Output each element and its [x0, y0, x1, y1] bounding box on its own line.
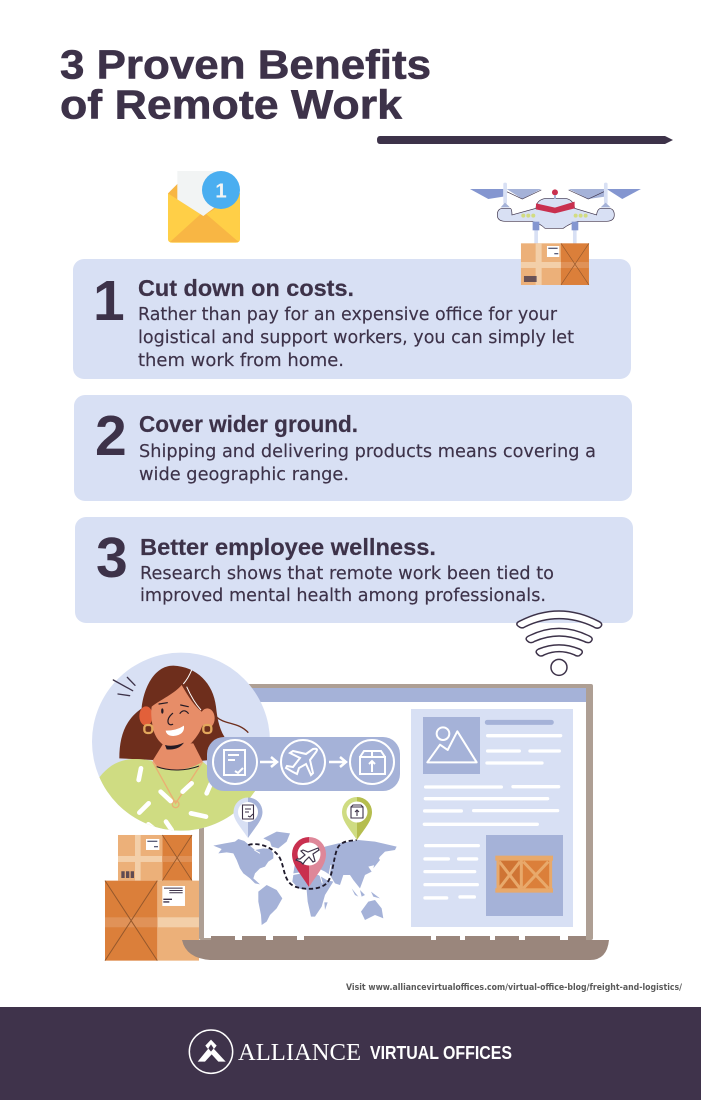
illustration: woman in circle — [92, 653, 270, 847]
icon: envelope with notification: 1 — [215, 179, 227, 202]
neck — [153, 743, 203, 770]
hair — [119, 666, 227, 762]
panel: benefit 1: Cut down on costs. — [138, 275, 354, 301]
dashed route — [248, 840, 357, 889]
panel: benefit 1: Rather than pay for an expensive office for your — [138, 305, 558, 325]
logo wordmark: ALLIANCE — [238, 1040, 361, 1066]
laptop base — [182, 936, 609, 960]
upper parcel — [118, 835, 192, 881]
title — [60, 42, 431, 128]
map pin: plane — [292, 837, 326, 887]
laptop frame — [199, 684, 593, 940]
panel: benefit 2: Cover wider ground. — [139, 411, 358, 437]
icon: document — [213, 740, 257, 784]
footer band — [0, 1007, 701, 1100]
shirt dashes — [139, 768, 211, 830]
panel: benefit 3: 3 — [96, 526, 128, 590]
title: 3 Proven Benefits — [60, 42, 431, 88]
icon: wifi signal — [517, 611, 602, 675]
panel: benefit 1 — [73, 259, 631, 379]
panel: benefit 2: 2 — [95, 404, 127, 468]
title underline bar — [377, 136, 673, 144]
map pin: parcel — [342, 797, 372, 840]
world map — [213, 832, 397, 925]
process pill with icons — [207, 737, 400, 791]
shirt — [100, 759, 255, 831]
panel: benefit 1: them work from home. — [138, 351, 344, 371]
surprise lines — [113, 677, 135, 696]
hair strand — [216, 717, 248, 733]
face — [151, 685, 203, 750]
map pin: document — [234, 798, 262, 838]
panel: benefit 3: Better employee wellness. — [140, 534, 436, 560]
panel: benefit 2: wide geographic range. — [139, 465, 349, 485]
panel: benefit 1: 1 — [93, 269, 125, 333]
panel: benefit 3 — [75, 517, 633, 623]
stacked parcels — [105, 835, 199, 961]
icon: envelope with notification — [168, 171, 240, 243]
arrow — [329, 757, 346, 767]
arrow — [260, 757, 277, 767]
panel: benefit 3: improved mental health among professionals. — [140, 586, 546, 606]
panel: benefit 3: Research shows that remote work been tied to — [140, 564, 554, 584]
icon: delivery drone with parcel — [470, 183, 641, 285]
laptop screen — [199, 684, 593, 940]
panel: benefit 2: Shipping and delivering products means covering a — [139, 442, 596, 462]
panel: benefit 1: logistical and support workers, you can simply let — [138, 328, 574, 348]
icon: parcel — [350, 740, 394, 784]
panel: benefit 2 — [74, 395, 632, 501]
ears — [139, 706, 153, 726]
title: of Remote Work — [60, 82, 402, 128]
icon: plane — [281, 740, 325, 784]
lower parcel — [105, 881, 199, 961]
source link: Visit www.alliancevirtualoffices.com/virtual-office-blog/freight-and-logistics/ — [346, 983, 683, 993]
footer band: VIRTUAL OFFICES — [370, 1043, 512, 1063]
logo mark — [189, 1030, 233, 1073]
web page panel — [411, 709, 573, 927]
